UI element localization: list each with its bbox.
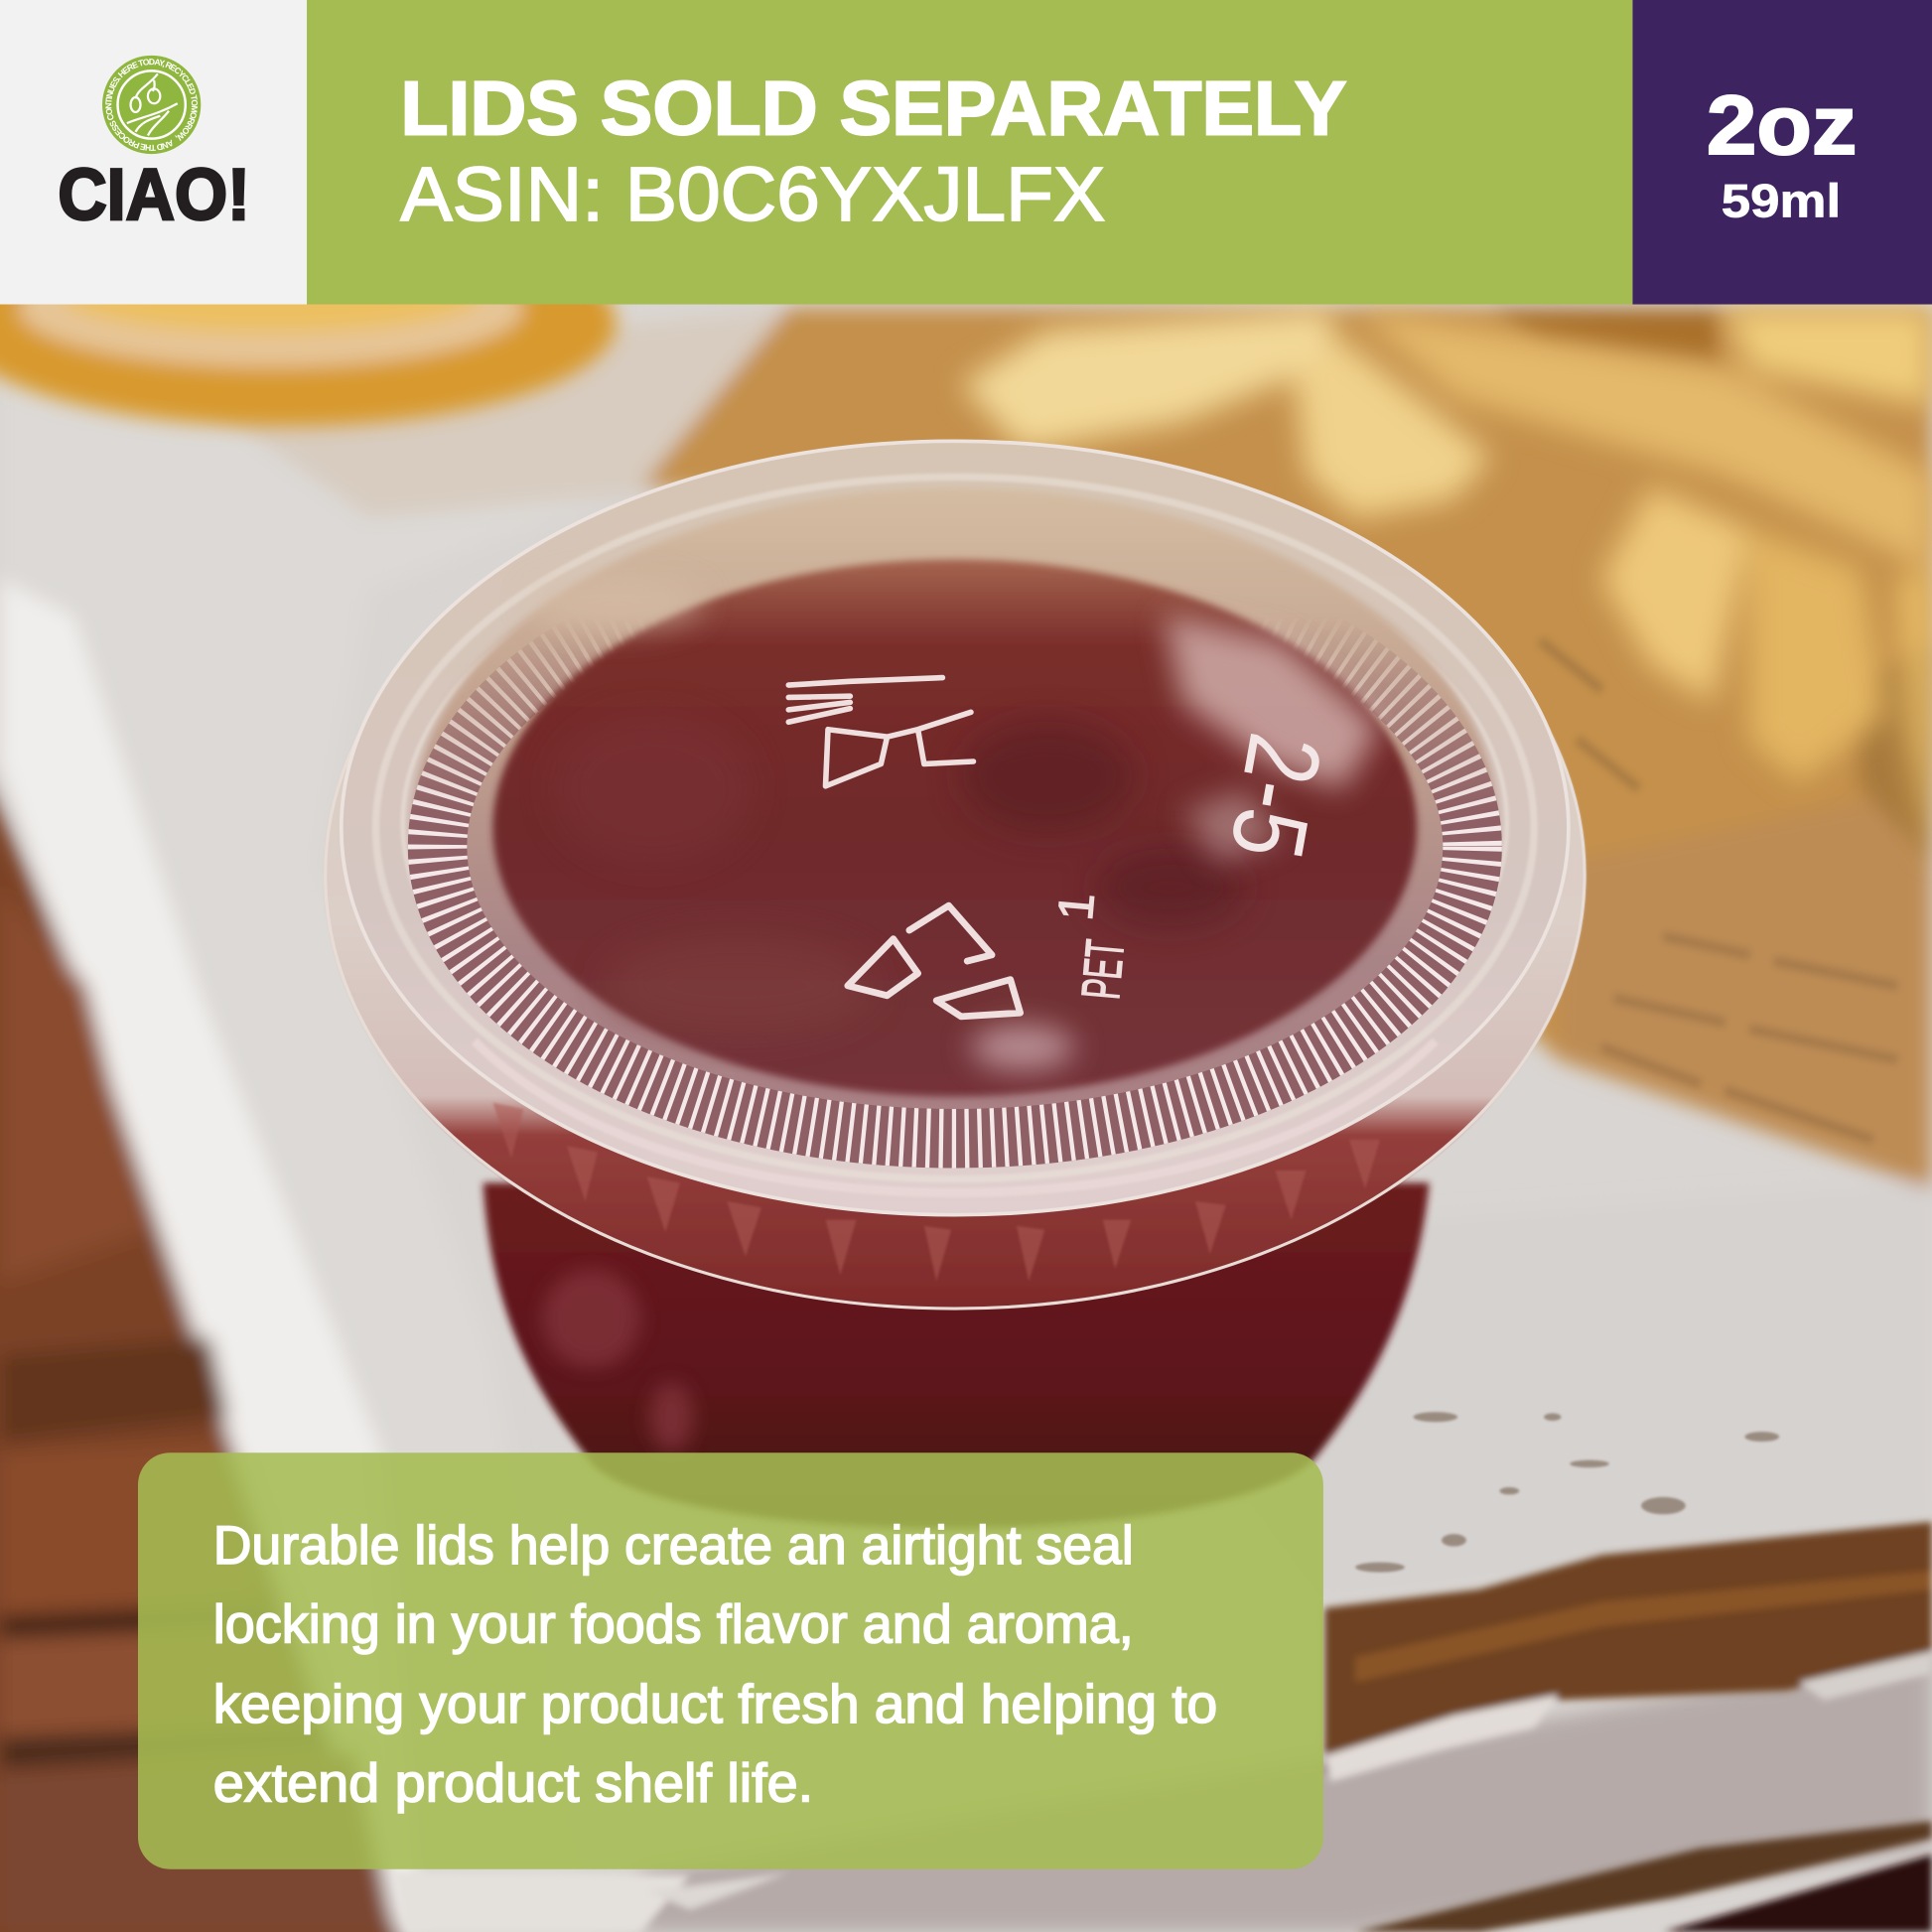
flange notches bbox=[492, 1103, 1380, 1282]
callout text bbox=[213, 1515, 1217, 1813]
embossed text: size: 2-5 bbox=[1208, 726, 1343, 867]
lemon slice bbox=[0, 304, 631, 443]
logo panel bbox=[0, 0, 307, 305]
cup body reflections bbox=[542, 1269, 694, 1451]
embossed recycling symbol bbox=[848, 905, 1021, 1017]
asin: ASIN: B0C6YXJLFX bbox=[400, 152, 1105, 237]
embossed text: PET: PET bbox=[1070, 937, 1136, 1002]
title banner bbox=[307, 0, 1632, 305]
ribbed ring bbox=[438, 554, 1472, 1139]
darker sauce swirls bbox=[554, 715, 1244, 1035]
peeling paint and wood, lower right bbox=[394, 1522, 1932, 1932]
logo badge: AND THE PROCESS CONTINUES. HERE TODAY, RECYCLED TOMORROW, bbox=[105, 59, 198, 151]
lid inner well bbox=[413, 487, 1497, 1159]
callout text: extend product shelf life. bbox=[213, 1752, 813, 1813]
cup body bbox=[483, 1182, 1430, 1528]
embossed text: recycling number: 1 bbox=[1047, 891, 1105, 922]
size panel bbox=[1632, 0, 1932, 305]
callout text: keeping your product fresh and helping to bbox=[213, 1674, 1217, 1734]
size ml: 59ml bbox=[1722, 174, 1841, 226]
size oz: 2oz bbox=[1707, 78, 1857, 172]
ribbed ring base bbox=[438, 554, 1472, 1139]
sauce surface bbox=[492, 559, 1417, 1097]
callout text: locking in your foods flavor and aroma, bbox=[213, 1593, 1134, 1654]
wood plank, left bbox=[0, 752, 407, 1932]
lid concentric rings bbox=[376, 477, 1534, 1179]
title: LIDS SOLD SEPARATELY bbox=[400, 66, 1346, 151]
glare on lid bbox=[530, 577, 1380, 1069]
callout panel bbox=[138, 1452, 1323, 1869]
printed paper marks bbox=[1540, 640, 1897, 1140]
flange edge highlight bbox=[326, 441, 1585, 1309]
french fries bbox=[961, 308, 1932, 863]
bright lower lid edge bbox=[475, 1041, 1436, 1192]
cup flange bbox=[324, 441, 1586, 1309]
paint flecks bbox=[1355, 1412, 1779, 1573]
logo wordmark: CIAO! bbox=[58, 154, 250, 235]
sauce cup with lid bbox=[324, 441, 1586, 1528]
callout text: Durable lids help create an airtight seal bbox=[213, 1515, 1134, 1576]
lid outer rim bbox=[342, 441, 1569, 1215]
kraft paper, right bbox=[640, 308, 1932, 1189]
embossed food symbol bbox=[788, 678, 973, 786]
header bar bbox=[0, 0, 1932, 305]
